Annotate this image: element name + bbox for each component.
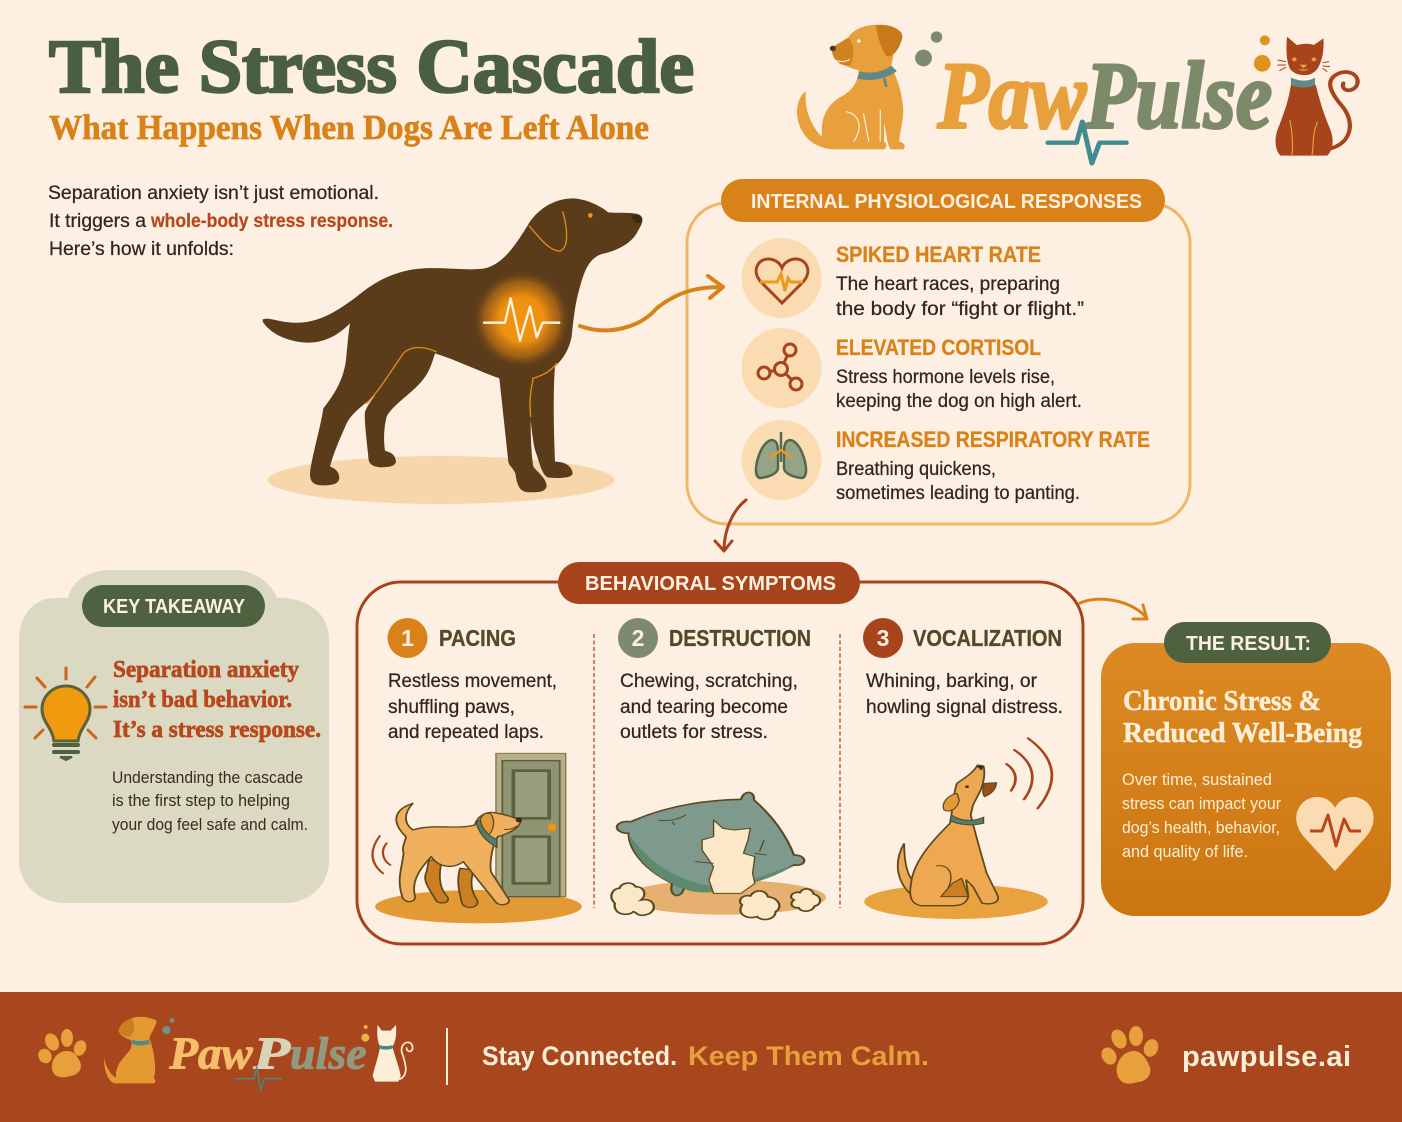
subtitle: What Happens When Dogs Are Left Alone: [49, 108, 649, 147]
symptom 1: pacing: [388, 618, 557, 743]
arrow: to behavioral symptoms: [715, 500, 746, 551]
logo wordmark: Paw: [937, 44, 1087, 149]
logo wordmark: [937, 44, 1272, 149]
symptom 3: vocalization: VOCALIZATION: [913, 625, 1062, 651]
icon: footer cat: [373, 1025, 413, 1082]
logo: PawPulse header: [797, 25, 1358, 163]
illustration: howling dog: [864, 738, 1052, 919]
takeaway text: is the first step to helping: [112, 792, 290, 810]
panel: the result: [1101, 622, 1391, 916]
result title: Chronic Stress &: [1123, 686, 1321, 717]
item: respiratory: Breathing quickens,: [836, 458, 996, 480]
pulse line: [1048, 122, 1126, 163]
takeaway text: your dog feel safe and calm.: [112, 816, 308, 834]
symptom 1: pacing: Restless movement,: [388, 670, 557, 692]
panel: key takeaway: [19, 570, 329, 903]
heart glow: [472, 269, 572, 369]
symptom 3: vocalization: howling signal distress.: [866, 696, 1063, 718]
symptom 1: pacing: shuffling paws,: [388, 696, 515, 718]
footer wordmark: [168, 1028, 367, 1078]
icon: dog: [797, 25, 905, 149]
result title: Reduced Well-Being: [1123, 718, 1362, 749]
icon: cat: [1276, 37, 1358, 156]
result text: [1122, 771, 1281, 861]
item: cortisol: [836, 335, 1082, 412]
footer wordmark: P: [252, 1028, 291, 1078]
icon: lightbulb: [25, 668, 106, 760]
illustration: torn pillow: [611, 792, 826, 919]
intro text: Separation anxiety isn’t just emotional.: [48, 182, 379, 204]
symptom 1: pacing: 1: [401, 625, 414, 651]
icon: molecule: [742, 328, 822, 408]
icon: heart: [1296, 797, 1374, 871]
panel heading: [721, 179, 1165, 222]
symptom 2: destruction: [618, 618, 811, 743]
item: heart rate: SPIKED HEART RATE: [836, 242, 1041, 267]
pulse line: [484, 298, 559, 341]
outline accents: [367, 212, 567, 417]
item: cortisol: ELEVATED CORTISOL: [836, 335, 1041, 360]
takeaway heading: KEY TAKEAWAY: [103, 595, 245, 618]
pulse line: [235, 1067, 282, 1090]
symptom 3: vocalization: Whining, barking, or: [866, 670, 1037, 692]
ground shadow: [268, 456, 614, 504]
result text: and quality of life.: [1122, 843, 1248, 861]
symptom 2: destruction: DESTRUCTION: [669, 625, 811, 651]
symptom 2: destruction: outlets for stress.: [620, 721, 768, 743]
item: respiratory: INCREASED RESPIRATORY RATE: [836, 427, 1150, 452]
intro text: whole-body stress response.: [150, 210, 393, 232]
website: pawpulse.ai: [1182, 1041, 1351, 1073]
symptom 2: destruction: 2: [632, 625, 644, 651]
takeaway text: Understanding the cascade: [112, 769, 303, 787]
divider: [446, 1028, 448, 1085]
item: heart rate: The heart races, preparing: [836, 273, 1060, 295]
dog body: [263, 198, 642, 492]
symptom 3: vocalization: [863, 618, 1063, 718]
illustrations: [373, 738, 1052, 923]
icon: lungs: [742, 420, 822, 500]
footer: [0, 992, 1402, 1122]
snout shading: [631, 215, 642, 223]
logo wordmark: Pulse: [1085, 44, 1272, 149]
arrow: to result: [1080, 599, 1147, 619]
item: heart rate: the body for “fight or flight.”: [836, 298, 1084, 320]
icon: footer dog: [104, 1017, 157, 1083]
illustration: dog silhouette with glowing heart: [263, 198, 642, 504]
panel heading: [558, 562, 860, 604]
illustration: dog pacing by door: [373, 753, 582, 923]
tagline: Stay Connected.: [482, 1041, 677, 1071]
tagline: [482, 1041, 929, 1071]
footer logo: [104, 1017, 413, 1090]
icon: paw right: [1098, 1026, 1161, 1084]
result text: dog’s health, behavior,: [1122, 819, 1280, 837]
symptom 2: destruction: Chewing, scratching,: [620, 670, 798, 692]
icon: heart: [742, 238, 822, 318]
item: cortisol: keeping the dog on high alert.: [836, 390, 1082, 412]
result text: stress can impact your: [1122, 795, 1281, 813]
takeaway text: [112, 769, 308, 834]
item: respiratory: [836, 427, 1150, 504]
panel: behavioral symptoms: [357, 562, 1083, 944]
takeaway statement: It’s a stress response.: [113, 716, 321, 743]
item: heart rate: [836, 242, 1084, 320]
result heading: [1164, 622, 1331, 663]
dots: [162, 1018, 369, 1042]
panel: internal physiological responses: [687, 179, 1190, 524]
takeaway heading: [82, 585, 265, 627]
takeaway statement: isn’t bad behavior.: [113, 686, 292, 713]
panel heading: INTERNAL PHYSIOLOGICAL RESPONSES: [751, 190, 1142, 213]
eye: [588, 213, 593, 218]
tagline: Keep Them Calm.: [688, 1041, 929, 1071]
symptom 1: pacing: PACING: [439, 625, 516, 651]
intro text: [48, 182, 393, 260]
takeaway statement: [113, 656, 321, 743]
takeaway statement: Separation anxiety: [113, 656, 300, 683]
result text: Over time, sustained: [1122, 771, 1272, 789]
symptom 3: vocalization: 3: [877, 625, 889, 651]
result title: [1123, 686, 1362, 749]
item: respiratory: sometimes leading to panting.: [836, 482, 1080, 504]
dots: [915, 31, 1271, 72]
result heading: THE RESULT:: [1186, 632, 1311, 655]
footer wordmark: ulse: [290, 1028, 367, 1078]
footer wordmark: Paw: [168, 1028, 254, 1078]
symptom 2: destruction: and tearing become: [620, 696, 788, 718]
intro text: It triggers a: [49, 210, 146, 232]
symptom 1: pacing: and repeated laps.: [388, 721, 544, 743]
title: The Stress Cascade: [49, 25, 694, 109]
arrow: dog to physiological panel: [580, 276, 723, 330]
intro text: Here’s how it unfolds:: [49, 238, 234, 260]
icon: paw left: [36, 1029, 88, 1077]
item: cortisol: Stress hormone levels rise,: [836, 366, 1055, 388]
panel heading: BEHAVIORAL SYMPTOMS: [585, 572, 836, 595]
